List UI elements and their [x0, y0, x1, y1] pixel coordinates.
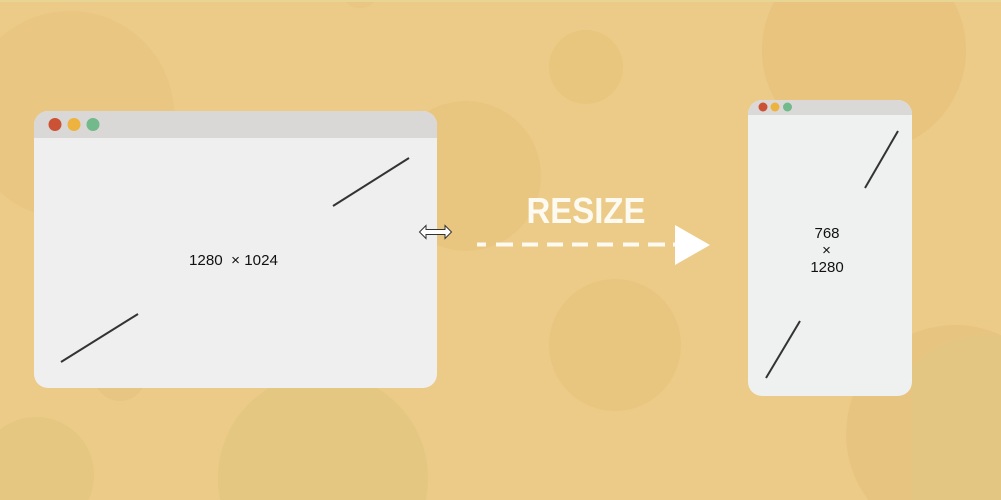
- label: 1280 x 1024: 1280 × 1024: [189, 252, 278, 269]
- window control: green: [86, 118, 100, 131]
- window body: [748, 100, 912, 396]
- window control: red: [758, 102, 768, 112]
- diagonal line: bottom left: [61, 314, 138, 362]
- label: 768 x 1280: [810, 225, 844, 276]
- title bar: [748, 100, 912, 115]
- diagonal line: bottom left: [766, 321, 800, 378]
- label: 768 x 1280: ×: [822, 242, 831, 259]
- window control: red: [48, 118, 62, 131]
- title bar: [34, 111, 437, 138]
- diagonal line: top right: [333, 158, 409, 206]
- label: 768 x 1280: 1280: [810, 259, 844, 276]
- large browser window: [34, 111, 437, 388]
- icon: horizontal resize cursor: [420, 226, 452, 238]
- window control: green: [783, 102, 792, 112]
- heading: resize: RESIZE: [526, 190, 646, 231]
- arrow: dashed resize arrow: [477, 225, 710, 265]
- window control: yellow: [770, 102, 780, 112]
- diagonal line: top right: [865, 131, 898, 188]
- small browser window: [748, 100, 912, 396]
- label: 768 x 1280: 768: [814, 225, 840, 242]
- window control: yellow: [68, 118, 80, 131]
- window body: [34, 111, 437, 388]
